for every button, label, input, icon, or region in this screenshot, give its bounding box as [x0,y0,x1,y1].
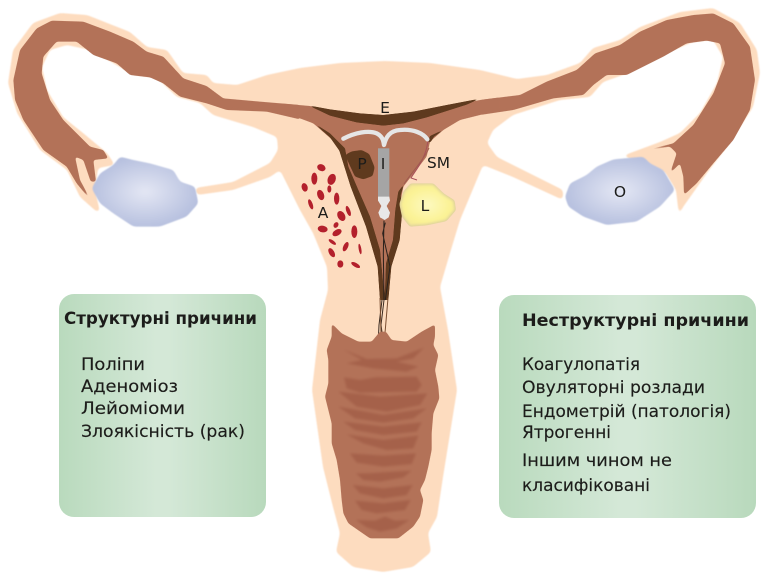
label I: I [381,155,385,173]
cervix and vagina [325,323,439,538]
intrauterine device [343,130,427,300]
heading: Структурні причини [64,309,257,328]
submucosal vessel line [411,140,428,180]
canal threads [378,300,384,347]
list of non-structural causes [522,355,731,496]
list of non-structural causes: Іншим чином не [522,451,672,471]
uterine muscle wall [280,97,500,300]
left fallopian tube [13,21,300,202]
label A: A [318,204,329,222]
anatomy labels [318,99,626,222]
list of non-structural causes: Ендометрій (патологія) [522,402,731,422]
label P: P [357,155,367,173]
list of non-structural causes: Овуляторні розлади [522,378,705,398]
left ovary [92,157,198,227]
panel background [499,295,756,518]
polyp [345,150,375,179]
label SM: SM [427,154,450,172]
right fallopian tube [480,13,755,195]
leiomyoma: yellow fibroid [400,184,455,226]
cervical canal walls [380,298,388,333]
list of structural causes: Аденоміоз [81,377,178,397]
list of non-structural causes: Ятрогенні [522,423,611,443]
label E: E [380,99,390,117]
endometrium: dark lining [308,99,480,300]
lower cavity line on the right wall [404,148,429,184]
list of non-structural causes: Коагулопатія [522,355,640,375]
list of structural causes: Злоякісність (рак) [81,422,245,442]
label L: L [421,197,430,215]
list of structural causes [81,355,245,442]
heading: Неструктурні причини [522,311,749,330]
panel: structural causes [59,294,266,517]
label O: O [614,183,626,201]
list of non-structural causes: класифіковані [522,476,650,496]
list of structural causes: Лейоміоми [81,399,185,419]
right ovary [565,157,675,225]
panel: non-structural causes [499,295,756,518]
panel background [59,294,266,517]
list of structural causes: Поліпи [81,355,145,375]
adenomyosis: red spots [301,163,362,269]
